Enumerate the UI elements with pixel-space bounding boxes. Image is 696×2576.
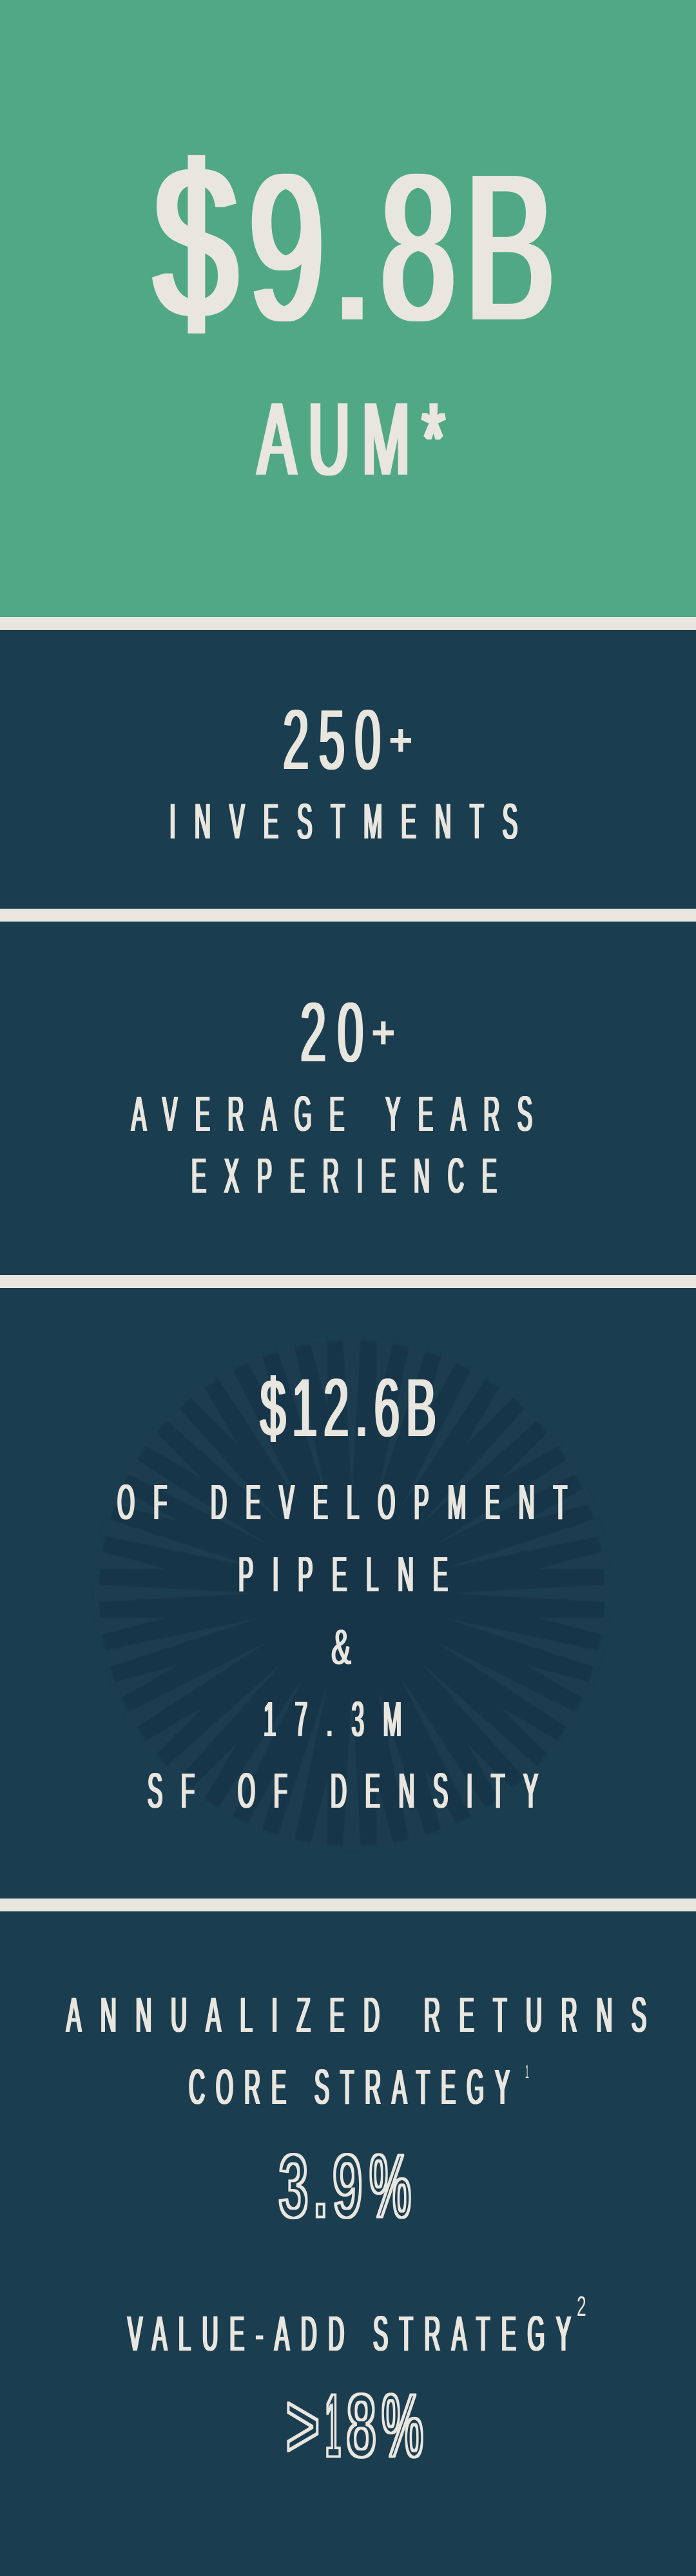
text: of development pipelne: OF DEVELOPMENT [117, 1474, 567, 1530]
text: of development pipelne [117, 1474, 567, 1602]
label: average years experience: EXPERIENCE [191, 1148, 497, 1204]
label: average years experience: AVERAGE YEARS [131, 1086, 532, 1142]
figure: 250+: 250 [283, 692, 381, 788]
text: 17.3M sf of density: 17.3M [264, 1691, 401, 1747]
figure: 3.9%: % [369, 2135, 411, 2237]
label: average years experience [131, 1086, 532, 1204]
headline figure: $9.8B: 9.8B [249, 131, 555, 364]
figure: 3.9%: 3.9 [278, 2136, 363, 2237]
label: AUM*: AUM* [258, 381, 445, 497]
figure: 20+: 20 [300, 985, 363, 1080]
panel: investments [0, 630, 696, 909]
text: 17.3M sf of density: SF OF DENSITY [148, 1763, 538, 1819]
panel: annualized returns [0, 1911, 696, 2576]
label: core strategy: CORE STRATEGY [189, 2059, 510, 2115]
label: core strategy: 1 [525, 2061, 529, 2083]
figure: >18%: 1 [325, 2376, 341, 2477]
figure: 20+ [300, 985, 396, 1080]
figure: 250+: + [389, 715, 413, 766]
icon: sunburst [94, 1336, 610, 1851]
panel: average years experience [0, 922, 696, 1275]
text: 17.3M sf of density [148, 1691, 538, 1819]
text: of development pipelne: PIPELNE [238, 1546, 448, 1602]
figure: 3.9% [278, 2135, 411, 2237]
figure: >18%: > [285, 2375, 320, 2477]
figure: $12.6B: $12.6B [260, 1361, 436, 1454]
headline figure: $9.8B: $ [155, 118, 237, 365]
heading: annualized returns: ANNUALIZED RETURNS [66, 1987, 646, 2043]
panel: development pipeline [0, 1288, 696, 1899]
label: investments: INVESTMENTS [169, 793, 517, 849]
text: ampersand: & [331, 1620, 351, 1675]
label: value-add strategy: VALUE-ADD STRATEGY [128, 2306, 571, 2362]
panel: assets under management [0, 0, 696, 617]
figure: >18%: % [382, 2374, 423, 2476]
label: value-add strategy: 2 [577, 2290, 586, 2322]
figure: >18% [285, 2374, 423, 2477]
figure: 20+: + [371, 1008, 396, 1058]
figure: >18%: 8 [346, 2375, 376, 2476]
